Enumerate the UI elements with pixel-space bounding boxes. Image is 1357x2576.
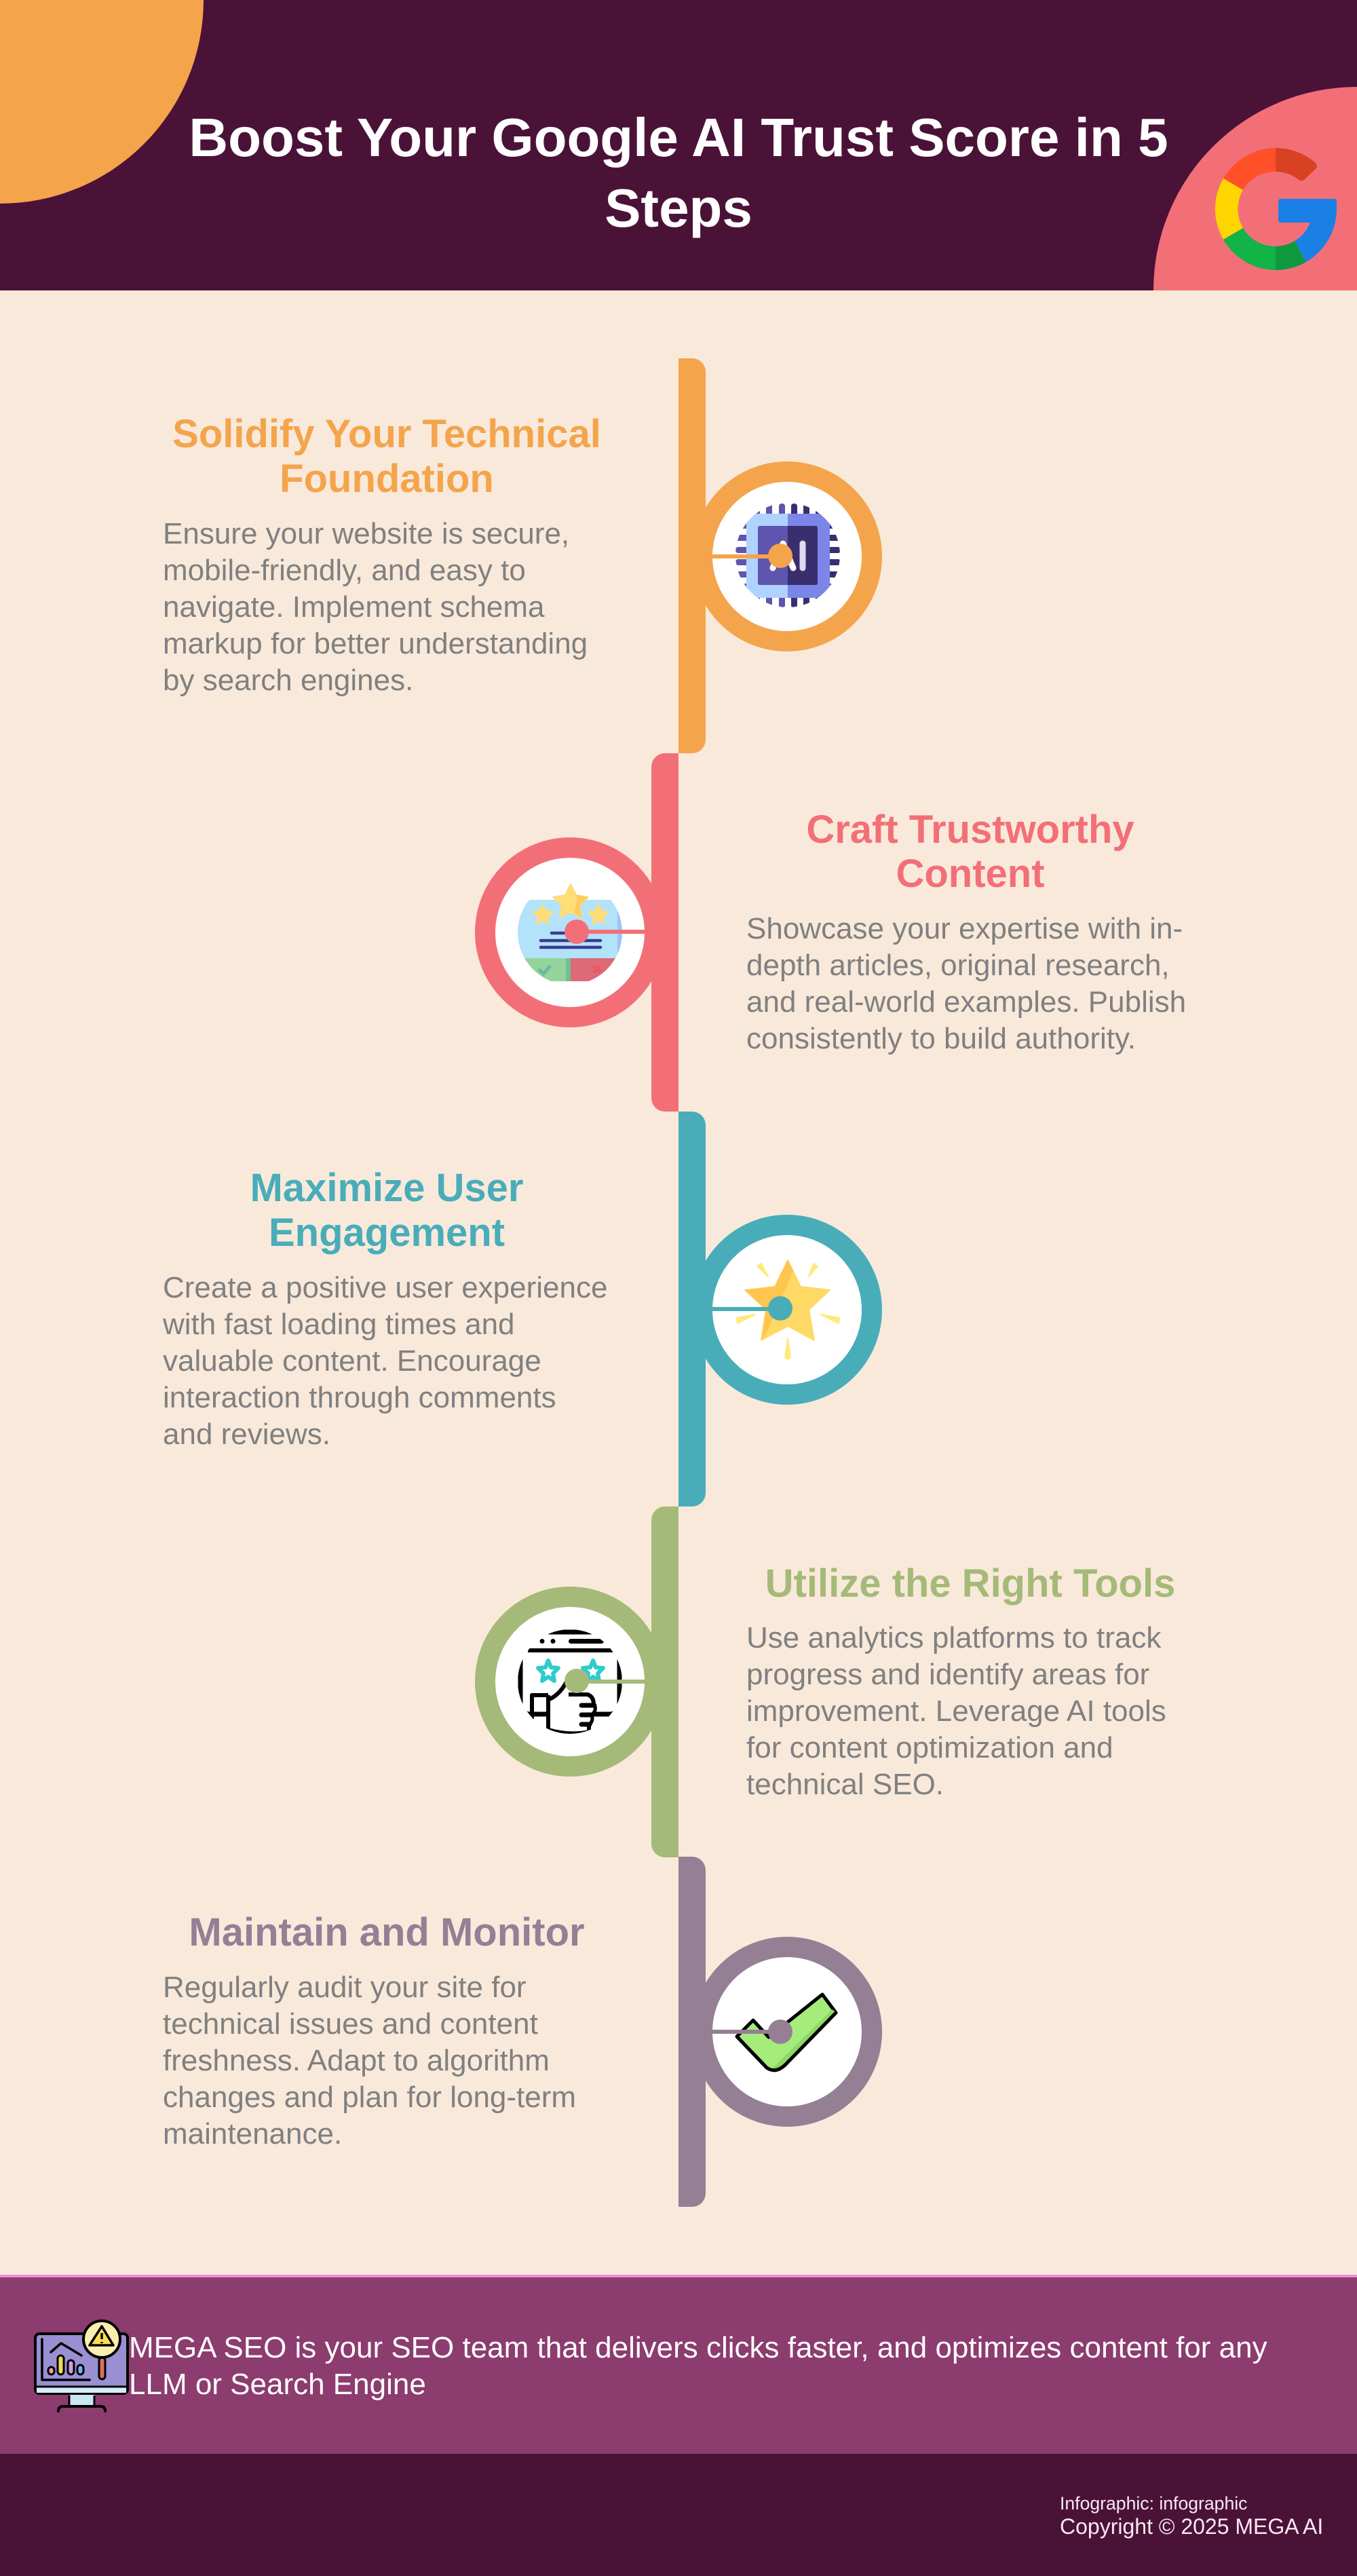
heading 2: Craft Trustworthy <box>806 808 1134 852</box>
body 1: Ensure your website is secure, <box>163 517 569 550</box>
heading 3: Maximize User <box>250 1166 523 1210</box>
icon: review card with stars <box>518 884 623 981</box>
timeline bar 2 <box>651 753 678 1112</box>
timeline bar 5 <box>678 1857 706 2207</box>
body 4: for content optimization and <box>746 1731 1113 1764</box>
step 3: maximize user engagement <box>162 1112 872 1507</box>
body 2: and real-world examples. Publish <box>746 985 1186 1019</box>
icon: monitor with warning magnifier <box>35 2321 128 2411</box>
body 4: Use analytics platforms to track <box>746 1621 1162 1654</box>
copyright: Copyright © 2025 MEGA AI <box>1060 2514 1323 2539</box>
body 5: maintenance. <box>163 2117 342 2151</box>
body 1: navigate. Implement schema <box>163 590 545 624</box>
heading 2: Content <box>896 852 1045 896</box>
body 5: changes and plan for long-term <box>163 2081 576 2114</box>
promo band <box>0 2275 1357 2454</box>
heading 1: Solidify Your Technical <box>172 412 601 456</box>
timeline bar 4 <box>651 1507 678 1857</box>
promo text: MEGA SEO is your SEO team that delivers clicks faster, and optimizes content for any <box>129 2331 1267 2364</box>
ring 2 <box>485 848 655 1017</box>
body 5: freshness. Adapt to algorithm <box>163 2044 550 2077</box>
body 4: progress and identify areas for <box>746 1658 1149 1691</box>
body 2: consistently to build authority. <box>746 1022 1136 1055</box>
timeline bar 1 <box>678 358 706 753</box>
body 3: Create a positive user experience <box>163 1271 607 1304</box>
body 3: interaction through comments <box>163 1381 556 1414</box>
connector dot 5 <box>712 2020 792 2044</box>
body 3: valuable content. Encourage <box>163 1344 541 1378</box>
body 5: Regularly audit your site for <box>163 1971 527 2004</box>
icon: Google logo <box>1215 148 1337 270</box>
step 2: craft trustworthy content <box>485 753 1186 1112</box>
icon: thumbs up rating <box>520 1632 619 1734</box>
connector dot 2 <box>565 920 645 944</box>
connector dot 3 <box>712 1296 792 1321</box>
body 1: by search engines. <box>163 664 413 697</box>
title: Boost Your Google AI Trust Score in 5 <box>189 107 1168 168</box>
ring 3 <box>702 1225 872 1395</box>
heading 4: Utilize the Right Tools <box>765 1561 1175 1606</box>
decorative orange circle <box>0 0 204 204</box>
ring 5 <box>702 1947 872 2117</box>
heading 1: Foundation <box>280 457 494 501</box>
title: Steps <box>605 178 752 238</box>
step 1: solidify technical foundation <box>163 358 872 753</box>
step 4: utilize the right tools <box>485 1507 1175 1857</box>
body 4: technical SEO. <box>746 1768 944 1801</box>
connector dot 4 <box>565 1669 645 1693</box>
credit line: Infographic: infographic <box>1060 2493 1247 2514</box>
body 2: Showcase your expertise with in- <box>746 912 1183 945</box>
body 5: technical issues and content <box>163 2007 538 2041</box>
icon: AI chip <box>735 504 841 608</box>
ring 1 <box>702 472 872 641</box>
icon: check mark <box>737 1994 836 2070</box>
body 1: mobile-friendly, and easy to <box>163 554 526 587</box>
heading 3: Engagement <box>269 1211 505 1255</box>
promo text: LLM or Search Engine <box>129 2368 426 2401</box>
body 4: improvement. Leverage AI tools <box>746 1694 1166 1728</box>
heading 5: Maintain and Monitor <box>189 1910 585 1954</box>
body 2: depth articles, original research, <box>746 949 1170 982</box>
decorative pink circle <box>1153 87 1357 290</box>
step 5: maintain and monitor <box>163 1857 872 2207</box>
body 3: and reviews. <box>163 1418 330 1451</box>
header band <box>0 0 1357 290</box>
connector dot 1 <box>712 544 792 568</box>
footer band <box>0 2454 1357 2576</box>
body 1: markup for better understanding <box>163 627 588 660</box>
timeline bar 3 <box>678 1112 706 1507</box>
ring 4 <box>485 1597 655 1766</box>
icon: shining star <box>737 1260 839 1359</box>
body 3: with fast loading times and <box>162 1308 515 1341</box>
